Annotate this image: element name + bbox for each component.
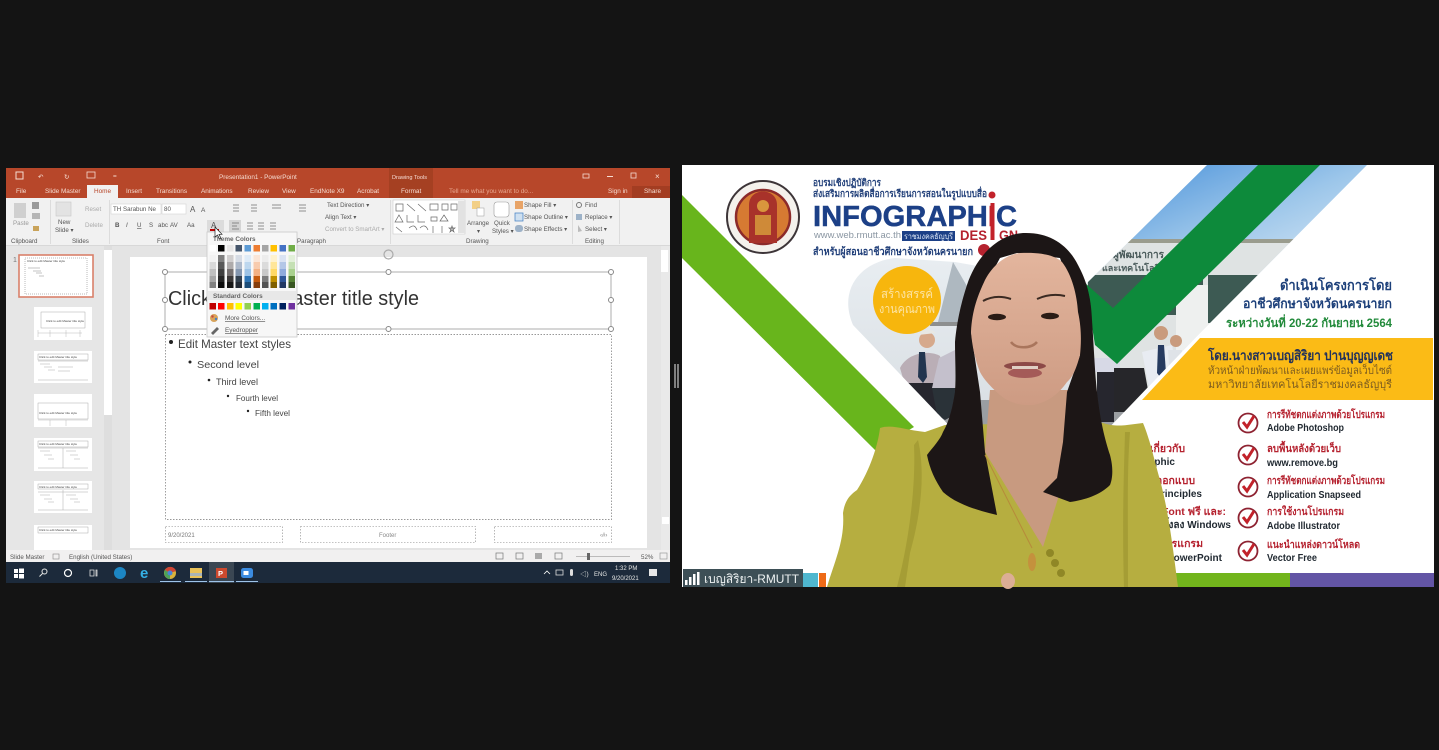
topic 1: การรีทัชตกแต่งภาพด้วยโปรแกรม (1267, 408, 1385, 421)
font colour dropdown: Standard Colors (213, 293, 263, 300)
topic list left column, partly hidden: การใช้ Font ฟรี และ: (1129, 504, 1226, 518)
ribbon: Text Direction ▾ (327, 202, 369, 209)
sky (1085, 165, 1370, 285)
topic 4: การใช้งานโปรแกรม (1267, 504, 1344, 518)
font colour dropdown: Theme Colors (213, 236, 256, 243)
ribbon tabs: Insert (126, 188, 142, 195)
building sign: ผู้พัฒนาการ (1113, 249, 1165, 262)
lobe background (848, 258, 1074, 400)
workspace background (6, 246, 670, 550)
topic 3 (1238, 474, 1385, 501)
building wall (1086, 243, 1290, 388)
file explorer icon (185, 568, 207, 582)
hair (927, 233, 1112, 515)
poster header text: สำหรับผู้สอนอาชีวศึกษาจังหวัดนครนายก (813, 245, 973, 259)
photo: campus building and staff: และเทคโนโลยีการศึกษา (1102, 262, 1197, 273)
panel: presenter video over poster (682, 165, 1434, 589)
university name box: ราชมงคลธัญบุรี (904, 232, 954, 241)
thumbnail 5: Click to edit Master title style (39, 442, 77, 446)
bottom colour strip (803, 573, 1434, 587)
topic 4 (1238, 504, 1344, 532)
ribbon: A (211, 221, 217, 230)
topic 5 (1238, 538, 1360, 564)
poster header text (813, 177, 1018, 259)
ribbon: U (137, 222, 141, 229)
theme colour shades (210, 255, 295, 288)
thumbnail scrollbar (104, 246, 112, 550)
ribbon tabs: Home (94, 188, 111, 195)
speaker text: โดย.นางสาวเบญสิริยา ปานบุญญเดช (1207, 346, 1393, 364)
theme colour top row (210, 245, 295, 252)
ribbon: Font (157, 238, 170, 245)
ribbon: Editing (585, 238, 604, 245)
logo seal (727, 181, 799, 253)
body placeholder: Third level (216, 377, 258, 387)
title bar (6, 168, 670, 198)
system tray: 1:32 PM (615, 566, 637, 572)
topic 4: Adobe Illustrator (1267, 521, 1340, 532)
topic list left column, partly hidden: การออกแบบ (1138, 475, 1195, 487)
yellow circle badge (873, 266, 941, 334)
edge icon (114, 567, 126, 579)
title bar: = (113, 173, 117, 180)
right staff group (1094, 326, 1184, 422)
standard colour row (210, 303, 295, 310)
task view icon (90, 570, 97, 576)
slide number placeholder: ‹#› (600, 533, 607, 539)
status bar: English (United States) (69, 554, 132, 561)
ribbon: abc (158, 222, 168, 229)
zoom name tag: เบญสิริยา-RMUTT (704, 572, 800, 586)
title bar: × (655, 172, 660, 181)
body placeholder: Fifth level (255, 409, 290, 418)
topic list left column, partly hidden: ติดตั้งลง Windows (1149, 517, 1231, 531)
poster header text: www.web.rmutt.ac.th (813, 230, 901, 241)
eyedropper item: Eyedropper (225, 327, 259, 334)
system tray: ENG (594, 572, 607, 578)
photo: campus building and staff (848, 165, 1367, 425)
topic list right column (1238, 408, 1385, 564)
thumbnail 3: Click to edit Master title style (39, 355, 77, 359)
ribbon: Find (585, 202, 598, 209)
thumbnail 7 (34, 525, 92, 550)
topic 1 (1238, 408, 1385, 434)
ribbon: Shape Effects ▾ (524, 226, 567, 233)
topic list left column, partly hidden (1121, 440, 1231, 564)
ribbon tabs: EndNote X9 (310, 188, 345, 195)
dark windows (1088, 275, 1203, 315)
speaker text: หัวหน้าฝ่ายพัฒนาและเผยแพร่ข้อมูลเว็บไซต์ (1208, 363, 1392, 377)
rotation handle (384, 250, 393, 259)
cortana icon (64, 570, 72, 576)
thumbnail 4: Click to edit Master title style (39, 411, 77, 415)
topic list left column, partly hidden: Infographic (1121, 457, 1175, 468)
ribbon tabs: Animations (201, 188, 233, 195)
topic 1: Adobe Photoshop (1267, 423, 1344, 434)
body placeholder (166, 334, 612, 520)
thumbnail 6 (34, 481, 92, 513)
ribbon tabs: Transitions (156, 188, 187, 195)
buttons (1046, 549, 1065, 577)
chrome icon (160, 567, 181, 582)
blouse sleeve shading (897, 432, 1130, 587)
lips (1004, 362, 1046, 378)
ribbon: Delete (85, 222, 103, 229)
windows taskbar (6, 562, 670, 583)
neck and chest (985, 390, 1068, 547)
ribbon: I (126, 222, 128, 229)
ribbon: Arrange (467, 220, 490, 227)
poster header text: GN (999, 228, 1018, 243)
yellow speaker band (1142, 338, 1433, 400)
windows start icon (14, 568, 24, 578)
presenter (827, 233, 1178, 589)
topic list left column, partly hidden: PowerPoint (1167, 553, 1223, 564)
video call screenshot canvas (6, 165, 1434, 589)
ribbon tabs: View (282, 188, 296, 195)
red i stem and dot (988, 192, 996, 240)
organiser text (1226, 276, 1392, 330)
footer placeholder: Footer (379, 533, 396, 539)
thumbnail 2 (34, 307, 92, 340)
ribbon (6, 198, 670, 246)
hand (1001, 573, 1015, 589)
eyes (988, 313, 1059, 320)
system tray: ◁) (580, 570, 589, 578)
thumbnail 6: Click to edit Master title style (39, 485, 77, 489)
title placeholder (162, 270, 614, 332)
topic 3: Application Snapseed (1267, 490, 1361, 501)
ribbon: New (58, 219, 71, 226)
topic 5: แนะนำแหล่งดาวน์โหลด (1267, 538, 1360, 551)
ribbon: Clipboard (11, 238, 38, 245)
infographic wordmark: INFOGRAPHIC (813, 201, 1017, 233)
ribbon tabs (16, 185, 670, 198)
powerpoint icon: P (218, 569, 223, 578)
organiser text: ระหว่างวันที่ 20-22 กันยายน 2564 (1226, 314, 1392, 330)
ribbon: Reset (85, 206, 101, 213)
title bar: Drawing Tools (392, 175, 427, 181)
blouse (827, 422, 1178, 587)
ribbon: Align Text ▾ (325, 214, 357, 221)
organiser text: ดำเนินโครงการโดย (1280, 276, 1392, 293)
ribbon tabs: Sign in (608, 188, 628, 195)
ribbon: Paste (13, 220, 29, 227)
topic list left column, partly hidden: โปรแกรม (1158, 537, 1203, 550)
poster header text: ส่งเสริมการผลิตสื่อการเรียนการสอนในรูปแบบสื่อ (813, 186, 987, 201)
thumbnail 4 (34, 394, 92, 427)
ribbon: Shape Fill ▾ (524, 202, 556, 209)
date placeholder (166, 526, 282, 542)
ribbon tabs: File (16, 188, 27, 195)
poster header text: DES (960, 228, 987, 243)
ribbon: Drawing (466, 238, 489, 245)
slide canvas (130, 250, 647, 548)
thumbnail 3 (34, 351, 92, 383)
light green diagonal stripe (682, 195, 914, 450)
thumbnail 5 (34, 438, 92, 471)
selected thumbnail (19, 255, 93, 297)
ribbon: 80 (164, 206, 171, 213)
powerpoint icon (209, 562, 234, 583)
ribbon: S (149, 222, 153, 229)
slide thumbnail panel (6, 246, 112, 550)
font colour dropdown (207, 232, 297, 337)
ribbon: Paragraph (297, 238, 326, 245)
ribbon: Aa (187, 222, 195, 229)
system tray: 9/20/2021 (612, 576, 639, 582)
system tray (544, 566, 657, 582)
date placeholder: 9/20/2021 (168, 533, 195, 539)
ribbon tabs: Format (401, 188, 421, 195)
thumbnail 2: Click to edit Master title style (46, 319, 84, 323)
zoom icon (236, 568, 258, 582)
ribbon: Convert to SmartArt ▾ (325, 226, 384, 233)
ribbon: Shape Outline ▾ (524, 214, 568, 221)
nose (1011, 342, 1037, 347)
main scrollbar (661, 246, 670, 550)
necklace and pendant (985, 455, 1036, 571)
slide number placeholder (494, 526, 612, 542)
title bar: Presentation1 - PowerPoint (219, 174, 297, 181)
ribbon tabs: Slide Master (45, 188, 81, 195)
status bar: 52% (641, 554, 654, 561)
poster background (682, 165, 1434, 587)
selected thumbnail: Click to edit Master title style (27, 259, 65, 263)
ribbon: Replace ▾ (585, 214, 613, 221)
poster header text: อบรมเชิงปฏิบัติการ (813, 177, 882, 189)
title placeholder: Click to edit Master title style (168, 288, 419, 310)
more colours item: More Colors... (225, 315, 265, 322)
ribbon tabs: Review (248, 188, 269, 195)
search icon (40, 569, 47, 576)
status bar (6, 550, 670, 562)
ribbon: A (201, 207, 206, 214)
ribbon tabs: Share (644, 188, 661, 195)
dark green check mark (1085, 165, 1320, 364)
ribbon: Styles ▾ (492, 228, 514, 235)
ribbon: Select ▾ (585, 226, 607, 233)
grey roof triangle (938, 262, 967, 322)
topic 2: ลบพื้นหลังด้วยเว็บ (1267, 440, 1341, 455)
topic 3: การรีทัชตกแต่งภาพด้วยโปรแกรม (1267, 474, 1385, 487)
topic list left column, partly hidden: Principles (1154, 489, 1202, 500)
floor (924, 400, 1136, 425)
face (971, 253, 1081, 405)
speaker text (1207, 346, 1393, 391)
body placeholder: Second level (197, 359, 259, 371)
topic list left column, partly hidden: ที่เกี่ยวกับ (1143, 440, 1185, 455)
red logo blob (978, 244, 990, 256)
status bar: Slide Master (10, 554, 44, 561)
ribbon: B (115, 222, 120, 229)
yellow circle badge: งานคุณภาพ (879, 302, 935, 317)
ribbon: Quick (494, 220, 511, 227)
ie icon: e (140, 565, 148, 582)
left staff group (900, 334, 956, 420)
ribbon: Slide ▾ (55, 227, 74, 234)
window divider handle (675, 364, 678, 388)
mouse cursor (215, 227, 222, 239)
ribbon: TH Sarabun Ne (113, 206, 157, 213)
title bar: ↻ (64, 174, 69, 181)
slide thumbnail panel: 1 (13, 257, 17, 264)
organiser text: อาชีวศึกษาจังหวัดนครนายก (1243, 296, 1392, 311)
ribbon tabs: Acrobat (357, 188, 379, 195)
body placeholder: Fourth level (236, 393, 278, 403)
ribbon: A (190, 205, 196, 214)
ribbon: ▾ (477, 228, 480, 235)
eyebrows (983, 295, 1065, 301)
footer placeholder (300, 526, 476, 542)
yellow circle badge: สร้างสรรค์ (881, 287, 933, 301)
thumbnail 7: Click to edit Master title style (39, 528, 77, 532)
zoom name tag (683, 569, 803, 587)
topic 5: Vector Free (1267, 553, 1317, 564)
ribbon tabs: Tell me what you want to do... (449, 188, 533, 195)
body placeholder: Edit Master text styles (178, 337, 291, 351)
speaker text: มหาวิทยาลัยเทคโนโลยีราชมงคลธัญบุรี (1208, 377, 1392, 391)
ribbon: Slides (72, 238, 89, 245)
topic 2 (1238, 440, 1341, 469)
topic 2: www.remove.bg (1266, 458, 1338, 469)
panel: PowerPoint window (6, 168, 670, 583)
ribbon: AV (170, 222, 179, 229)
title bar: ↶ (38, 174, 43, 181)
